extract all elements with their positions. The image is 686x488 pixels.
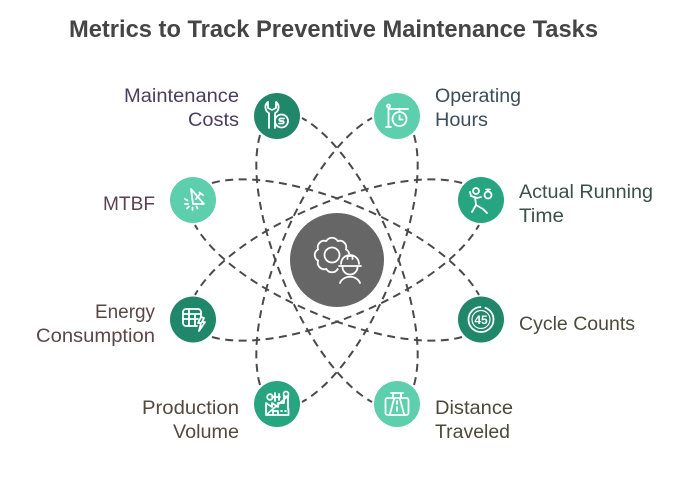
label: Maintenance Costs: Costs	[188, 110, 239, 131]
label: Cycle Counts: Cycle Counts	[519, 314, 635, 335]
label: Energy Consumption	[36, 302, 155, 347]
label: Maintenance Costs: Maintenance	[124, 86, 239, 107]
icon: energy table with bolt	[183, 309, 205, 331]
node: Production Volume	[142, 381, 300, 443]
central hub: gear and worker	[290, 213, 384, 307]
label: Energy Consumption: Energy	[95, 302, 155, 323]
label: Maintenance Costs	[124, 86, 239, 131]
node: Cycle Counts	[458, 296, 635, 342]
node: Actual Running Time	[458, 177, 653, 227]
label: MTBF: MTBF	[103, 194, 155, 215]
label: Actual Running Time	[519, 182, 653, 227]
icon: factory	[266, 392, 288, 415]
icon: 45 cycle dial	[468, 307, 494, 332]
label: Distance Traveled: Distance	[435, 398, 513, 419]
label: Operating Hours: Operating	[435, 86, 521, 107]
label: Actual Running Time: Actual Running	[519, 182, 653, 203]
label: Operating Hours: Hours	[435, 110, 488, 131]
label: Operating Hours	[435, 86, 521, 131]
icon: wrench and dollar coin	[265, 102, 288, 128]
label: Production Volume: Volume	[173, 422, 239, 443]
icon: road on rear-view mirror	[386, 393, 408, 415]
icon: hanging clock sign	[386, 104, 408, 127]
title: Metrics to Track Preventive Maintenance Tasks	[69, 16, 598, 43]
label: Production Volume	[142, 398, 239, 443]
dashed orbit curves	[195, 118, 479, 402]
icon text: 45: 45	[474, 313, 488, 327]
icon: gear	[315, 238, 349, 272]
node: Distance Traveled	[374, 381, 513, 443]
label: Production Volume: Production	[142, 398, 239, 419]
label: Distance Traveled: Traveled	[435, 422, 510, 443]
node: Operating Hours	[374, 86, 521, 139]
node: MTBF	[103, 177, 216, 223]
icon: worker with helmet	[338, 254, 362, 283]
icon: running figure with stopwatch	[470, 188, 492, 213]
node: Energy Consumption	[36, 296, 216, 347]
icon: broken gauge	[185, 189, 204, 210]
node: Maintenance Costs	[124, 86, 300, 139]
label: Energy Consumption: Consumption	[36, 326, 155, 347]
label: Distance Traveled	[435, 398, 513, 443]
label: Actual Running Time: Time	[519, 206, 564, 227]
